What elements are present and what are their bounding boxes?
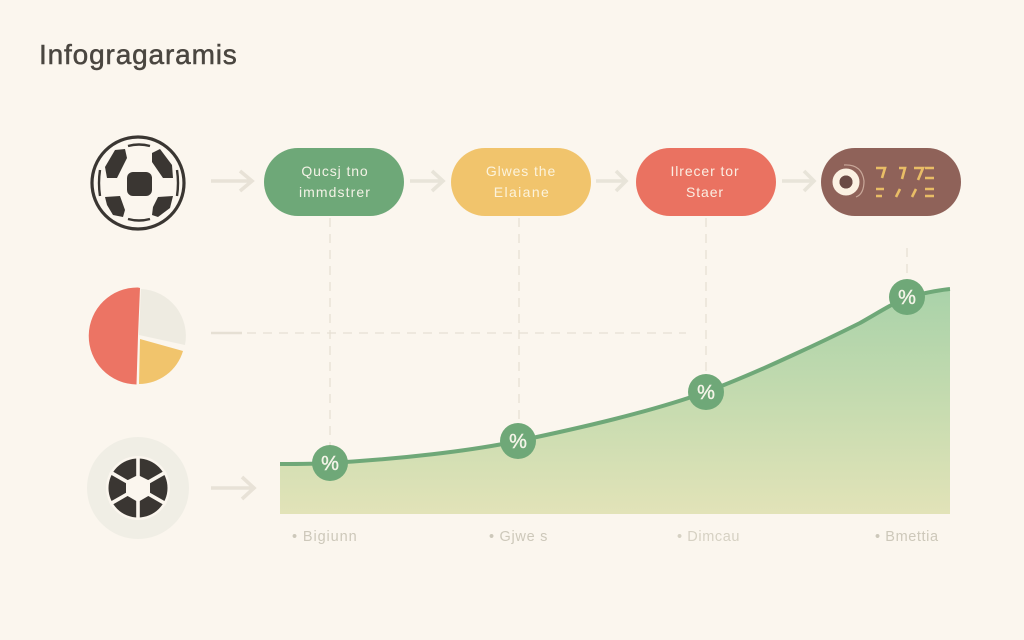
marker three: % <box>697 382 715 404</box>
axis label four: • Bmettia <box>875 529 939 545</box>
step three pill: Staer <box>686 184 724 200</box>
icon: pie chart <box>89 287 186 384</box>
step one pill: Qucsj tno <box>301 163 369 179</box>
marker three <box>688 374 724 410</box>
arrow: wheel to chart <box>211 477 254 499</box>
step two pill: Elaiane <box>494 184 550 200</box>
step three pill <box>636 148 776 216</box>
area chart <box>280 279 950 514</box>
marker one <box>312 445 348 481</box>
arrow: step two to step three <box>596 171 626 191</box>
marker four: % <box>898 287 916 309</box>
dashed connector lines <box>211 218 907 446</box>
axis label one: • Bigiunn <box>292 529 358 545</box>
icon: soccer ball <box>92 137 184 229</box>
chart fill <box>280 289 950 514</box>
arrow: ball to step one <box>211 171 252 191</box>
marker four <box>889 279 925 315</box>
arrow: step one to step two <box>410 171 443 191</box>
step one pill: immdstrer <box>299 184 371 200</box>
step one pill <box>264 148 404 216</box>
step two pill <box>451 148 591 216</box>
title: Infogragaramis <box>39 39 238 70</box>
marker two: % <box>509 431 527 453</box>
icon: wheel <box>87 437 189 539</box>
marker one: % <box>321 453 339 475</box>
step two pill: Glwes the <box>486 163 556 179</box>
chart line <box>280 289 950 464</box>
step four pill <box>821 148 961 216</box>
marker two <box>500 423 536 459</box>
step three pill: Ilrecer tor <box>670 163 740 179</box>
axis label two: • Gjwe s <box>489 529 548 545</box>
arrow: step three to step four <box>782 171 814 191</box>
axis label three: • Dimcau <box>677 529 740 545</box>
